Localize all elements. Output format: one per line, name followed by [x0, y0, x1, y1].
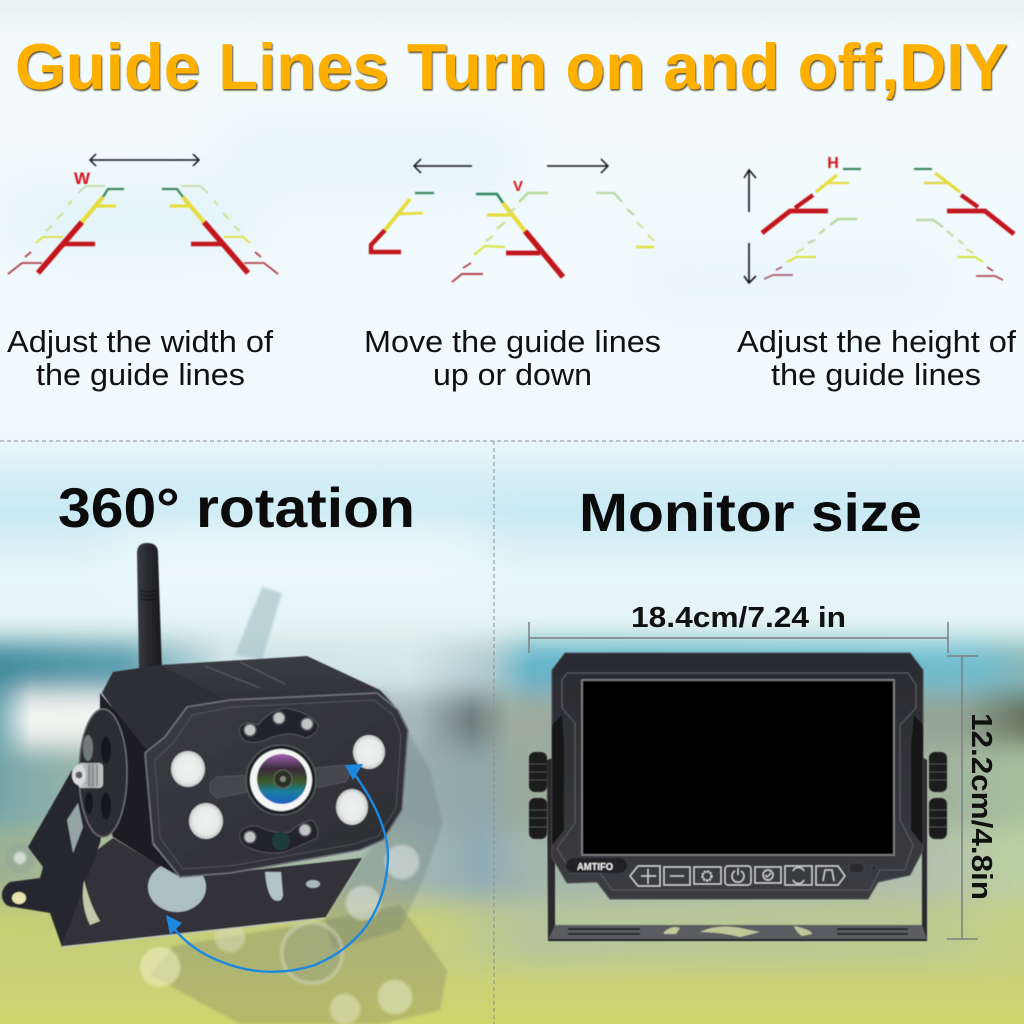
arrow: right: [547, 159, 608, 173]
caption: width: Adjust the width of: [7, 324, 273, 359]
button: rotate: [785, 866, 812, 885]
arrow: down: [744, 243, 756, 283]
ghost camera: rotation motion trail: [5, 587, 447, 1024]
icon: silver bolt: [72, 763, 103, 788]
dimension: width 18.4cm: 18.4cm/7.24 in: [631, 602, 846, 634]
panel: adjust height: [737, 155, 1016, 392]
button: check: [755, 867, 781, 883]
rear bracket: [62, 838, 362, 947]
dimension: height 12.2cm: [947, 656, 997, 939]
brand badge: AMTIFO: [577, 862, 613, 873]
camera body top: [102, 656, 400, 757]
guide line diagram: move: [371, 159, 654, 282]
side mounting plate: [2, 709, 127, 947]
monitor: [529, 653, 947, 940]
camera body side: [100, 693, 180, 877]
caption: width: [7, 324, 273, 392]
monitor screen: [582, 680, 894, 855]
arrow: up: [744, 170, 756, 212]
button: gear: [694, 867, 721, 884]
label: V: V: [513, 178, 523, 195]
caption: move: [364, 324, 661, 392]
top IR pill: [240, 708, 318, 742]
bottom IR pill: [240, 820, 318, 853]
brand badge: [566, 858, 627, 873]
label: W: W: [74, 169, 91, 188]
mounting bracket: [547, 757, 927, 940]
knobs: [529, 752, 947, 839]
button: minus: [664, 867, 690, 885]
arrow: width double arrow: [90, 154, 199, 166]
title: Guide Lines Turn on and off,DIY: [15, 30, 1008, 103]
heading: 360 rotation: 360° rotation: [58, 476, 415, 539]
arrow: left: [414, 159, 472, 173]
camera lens: [246, 745, 316, 815]
dimension: height 12.2cm: 12.2cm/4.8in: [965, 713, 997, 900]
antenna: [137, 543, 162, 672]
white LEDs: [171, 735, 385, 839]
monitor housing: [552, 653, 923, 899]
guide line diagram: height: [744, 155, 1014, 283]
caption: height: [737, 324, 1016, 392]
camera: [2, 543, 408, 947]
button: guide lines: [816, 866, 845, 885]
bars beside lens: [210, 765, 350, 798]
guide line diagram: width: [8, 154, 278, 274]
button: power: [725, 866, 751, 885]
caption: move: Move the guide lines: [364, 324, 661, 359]
panel: move up or down: [364, 159, 661, 392]
control buttons: [630, 866, 845, 886]
arrow: blue rotation arc: [166, 764, 388, 972]
dimension: width 18.4cm: [529, 602, 948, 653]
caption: height: the guide lines: [771, 357, 981, 392]
button: plus: [630, 866, 660, 886]
caption: height: Adjust the height of: [737, 324, 1016, 359]
caption: width: the guide lines: [36, 357, 245, 392]
label: H: H: [827, 155, 839, 172]
caption: move: up or down: [433, 357, 592, 392]
camera front plate: [145, 693, 408, 877]
heading: monitor size: Monitor size: [579, 483, 922, 543]
panel: adjust width: [7, 154, 278, 392]
